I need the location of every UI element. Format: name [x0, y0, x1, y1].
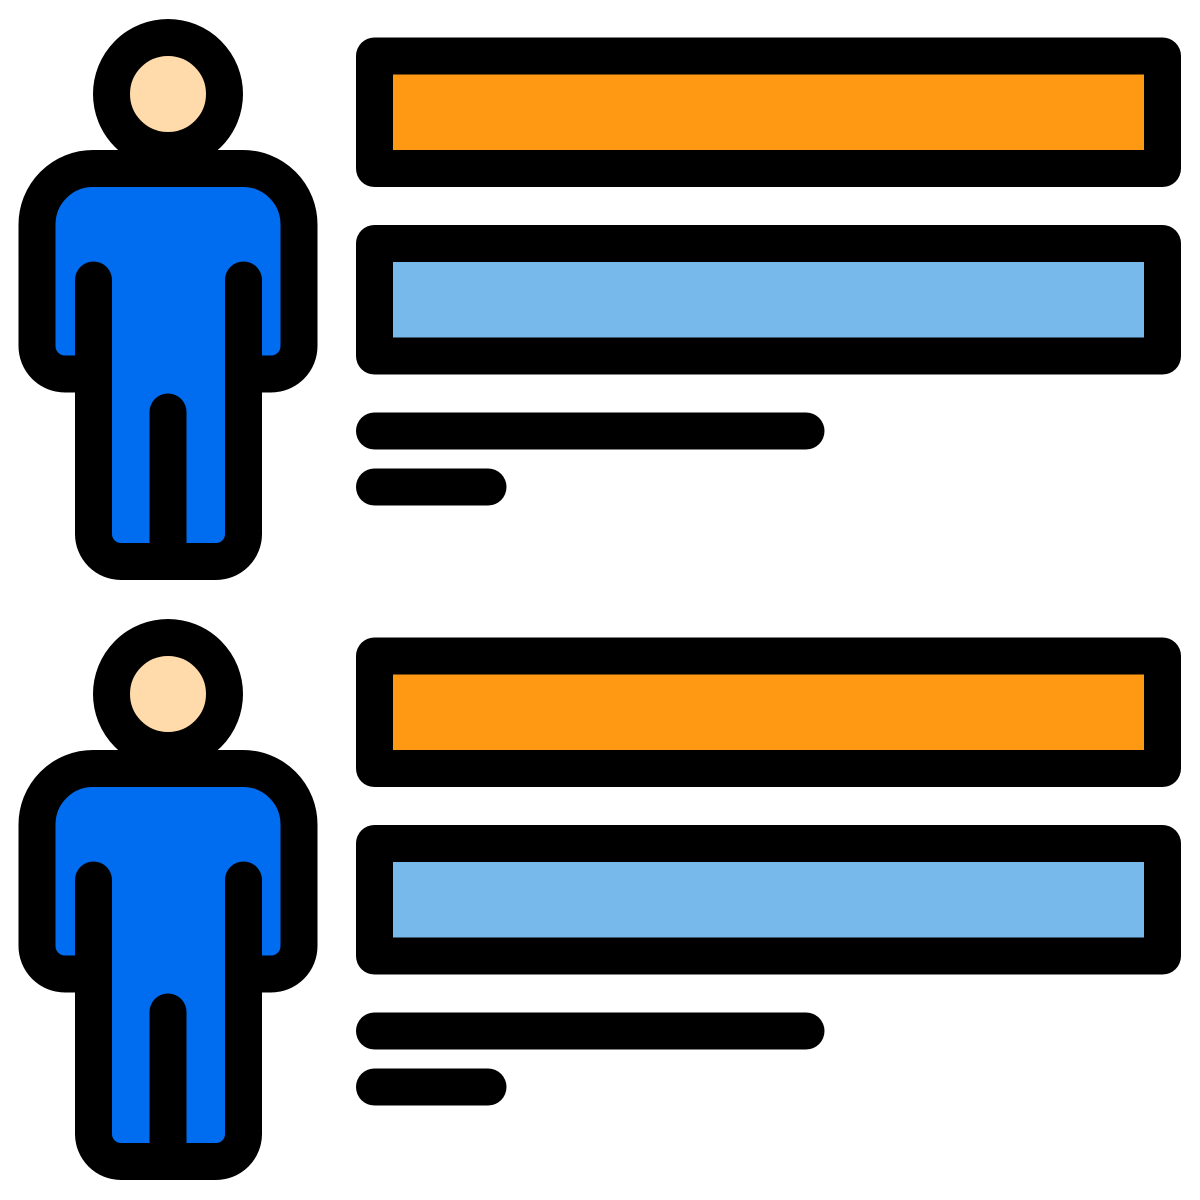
panel: person with bars (top) — [37, 38, 1162, 562]
panel: person with bars (bottom) — [37, 638, 1162, 1162]
